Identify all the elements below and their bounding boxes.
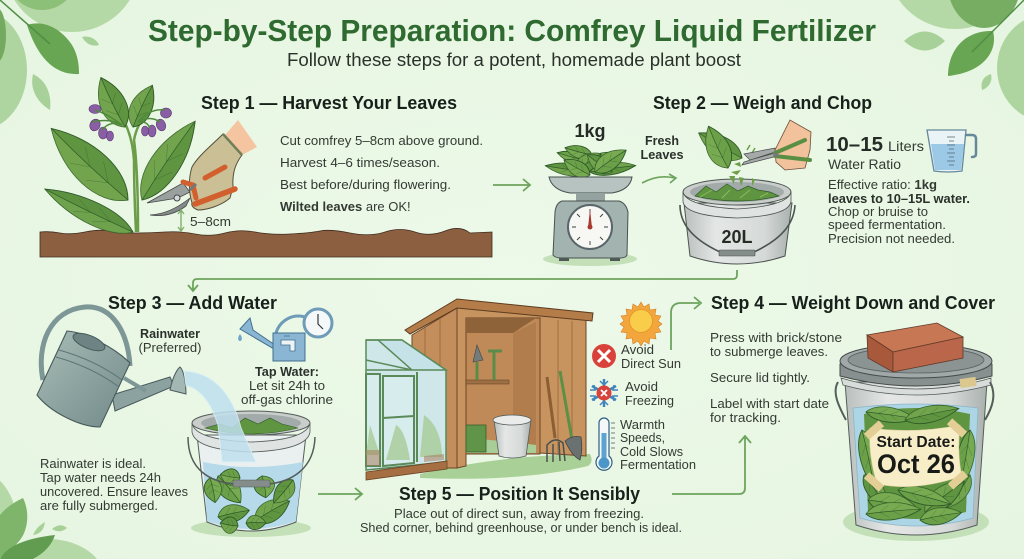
water ratio label: Liters [888, 139, 924, 154]
arrow: step 1 to step 2 [493, 179, 530, 191]
step 3 text: Tap water needs 24h [40, 470, 161, 485]
garden shed [405, 299, 593, 468]
step 5 text: Place out of direct sun, away from freezing. [394, 506, 644, 521]
water ratio label: 10–15 [826, 134, 883, 156]
tap water label: Let sit 24h to [249, 378, 325, 393]
icon: snowflake [590, 379, 618, 407]
lid [840, 352, 992, 386]
step 4 text [710, 330, 842, 425]
warmth label: Warmth [620, 417, 665, 432]
step 2 text: speed fermentation. [828, 217, 946, 232]
avoid direct sun label: Avoid [621, 342, 654, 357]
rainwater label: (Preferred) [138, 340, 202, 355]
step 5 text [360, 506, 682, 535]
warmth label: Cold Slows [620, 444, 683, 459]
crate [466, 425, 486, 452]
start date label: Start Date: [876, 434, 956, 451]
decorative foliage: top left [0, 0, 140, 130]
kitchen scale with leaves [543, 142, 637, 266]
step 1 text: Best before/during flowering. [280, 177, 451, 192]
step 4 text: to submerge leaves. [710, 344, 828, 359]
step 3 heading: Step 3 — Add Water [108, 293, 277, 313]
greenhouse [366, 340, 447, 480]
step 1 text: Harvest 4–6 times/season. [280, 155, 440, 170]
fresh leaves label: Leaves [640, 148, 684, 162]
hand with shears [742, 120, 811, 170]
step 2 text [828, 177, 970, 246]
arrow: step 3 to step 5 [318, 488, 362, 500]
arrow: step 2 to step 3 [188, 270, 737, 291]
step 3 bucket [188, 411, 315, 537]
water ratio label: Water Ratio [828, 157, 901, 172]
gloved hand with pruners [147, 120, 257, 216]
step 2 text: Chop or bruise to [828, 204, 928, 219]
panel: step 2 weigh and chop [543, 93, 976, 266]
subtitle: Follow these steps for a potent, homemade plant boost [287, 50, 741, 70]
step 4 text: Label with start date [710, 396, 829, 411]
step 4 text: for tracking. [710, 410, 781, 425]
panel: step 1 harvest [38, 72, 492, 257]
step 2 text: Effective ratio: 1kg [828, 177, 937, 192]
step 4 text: Press with brick/stone [710, 330, 842, 345]
step 5 heading: Step 5 — Position It Sensibly [399, 484, 640, 504]
decorative foliage: top right [887, 0, 1024, 122]
warmth label: Speeds, [620, 430, 665, 445]
warmth label [620, 417, 696, 472]
step 3 text: Rainwater is ideal. [40, 456, 146, 471]
measuring jug [927, 130, 976, 172]
icon: avoid sun cross [592, 344, 616, 368]
1kg label: 1kg [574, 121, 606, 141]
step 1 heading: Step 1 — Harvest Your Leaves [201, 93, 457, 113]
step 4 heading: Step 4 — Weight Down and Cover [711, 293, 995, 313]
step 3 text [40, 456, 188, 513]
step 2 text: leaves to 10–15L water. [828, 192, 970, 206]
shelf and hand tools [466, 380, 509, 384]
soil strip [40, 228, 492, 257]
rainwater label [138, 327, 202, 355]
step 1 text: Cut comfrey 5–8cm above ground. [280, 133, 483, 148]
step 3 text: uncovered. Ensure leaves [40, 484, 188, 499]
small bucket [494, 420, 531, 458]
icon: tap water can and clock [238, 309, 332, 361]
step 1 text [280, 133, 483, 214]
arrow: sun advice to step 4 [671, 297, 701, 350]
step 2 heading: Step 2 — Weigh and Chop [653, 93, 872, 113]
20L bucket [680, 179, 795, 264]
avoid freezing label: Avoid [625, 379, 658, 394]
arrow: step 5 to step 4 [672, 436, 751, 494]
brick [867, 323, 963, 372]
warmth label: Fermentation [620, 457, 696, 472]
ground patch [420, 454, 592, 479]
arrow: leaves to bucket [642, 174, 676, 183]
decorative foliage: bottom left [0, 470, 97, 559]
height marker [178, 210, 231, 231]
avoid freezing label [625, 379, 674, 408]
tap water label: off-gas chlorine [241, 392, 333, 407]
comfrey plant [38, 72, 207, 243]
panel: step 4 weight and cover [710, 293, 995, 541]
tap water label: Tap Water: [255, 365, 319, 379]
water ratio label [826, 134, 924, 172]
step 1 text: Wilted leaves are OK! [280, 199, 411, 214]
avoid direct sun label [621, 342, 681, 371]
height marker: 5–8cm [190, 214, 231, 229]
start date label: Oct 26 [877, 449, 955, 479]
20L bucket: 20L [721, 227, 753, 247]
step 5 text: Shed corner, behind greenhouse, or under bench is ideal. [360, 520, 682, 535]
icon: thermometer [596, 418, 615, 470]
fork and spade [547, 377, 555, 438]
icon: sun [620, 302, 662, 346]
sealed bucket [836, 323, 993, 541]
tap water label [241, 365, 333, 407]
title: Step-by-Step Preparation: Comfrey Liquid Fertilizer [148, 13, 876, 48]
rainwater label: Rainwater [140, 327, 200, 341]
avoid direct sun label: Direct Sun [621, 356, 681, 371]
fresh leaves label: Fresh [645, 134, 679, 148]
step 3 text: are fully submerged. [40, 498, 158, 513]
panel: step 5 position [360, 299, 696, 535]
step 4 text: Secure lid tightly. [710, 370, 810, 385]
start date label [864, 418, 968, 492]
water stream [184, 371, 256, 462]
purple flowers [88, 104, 172, 141]
fresh leaves label [640, 134, 684, 162]
avoid freezing label: Freezing [625, 393, 674, 408]
step 2 text: Precision not needed. [828, 231, 955, 246]
falling chopped leaves [693, 122, 755, 186]
panel: step 3 add water [37, 293, 333, 537]
watering can [37, 307, 186, 427]
